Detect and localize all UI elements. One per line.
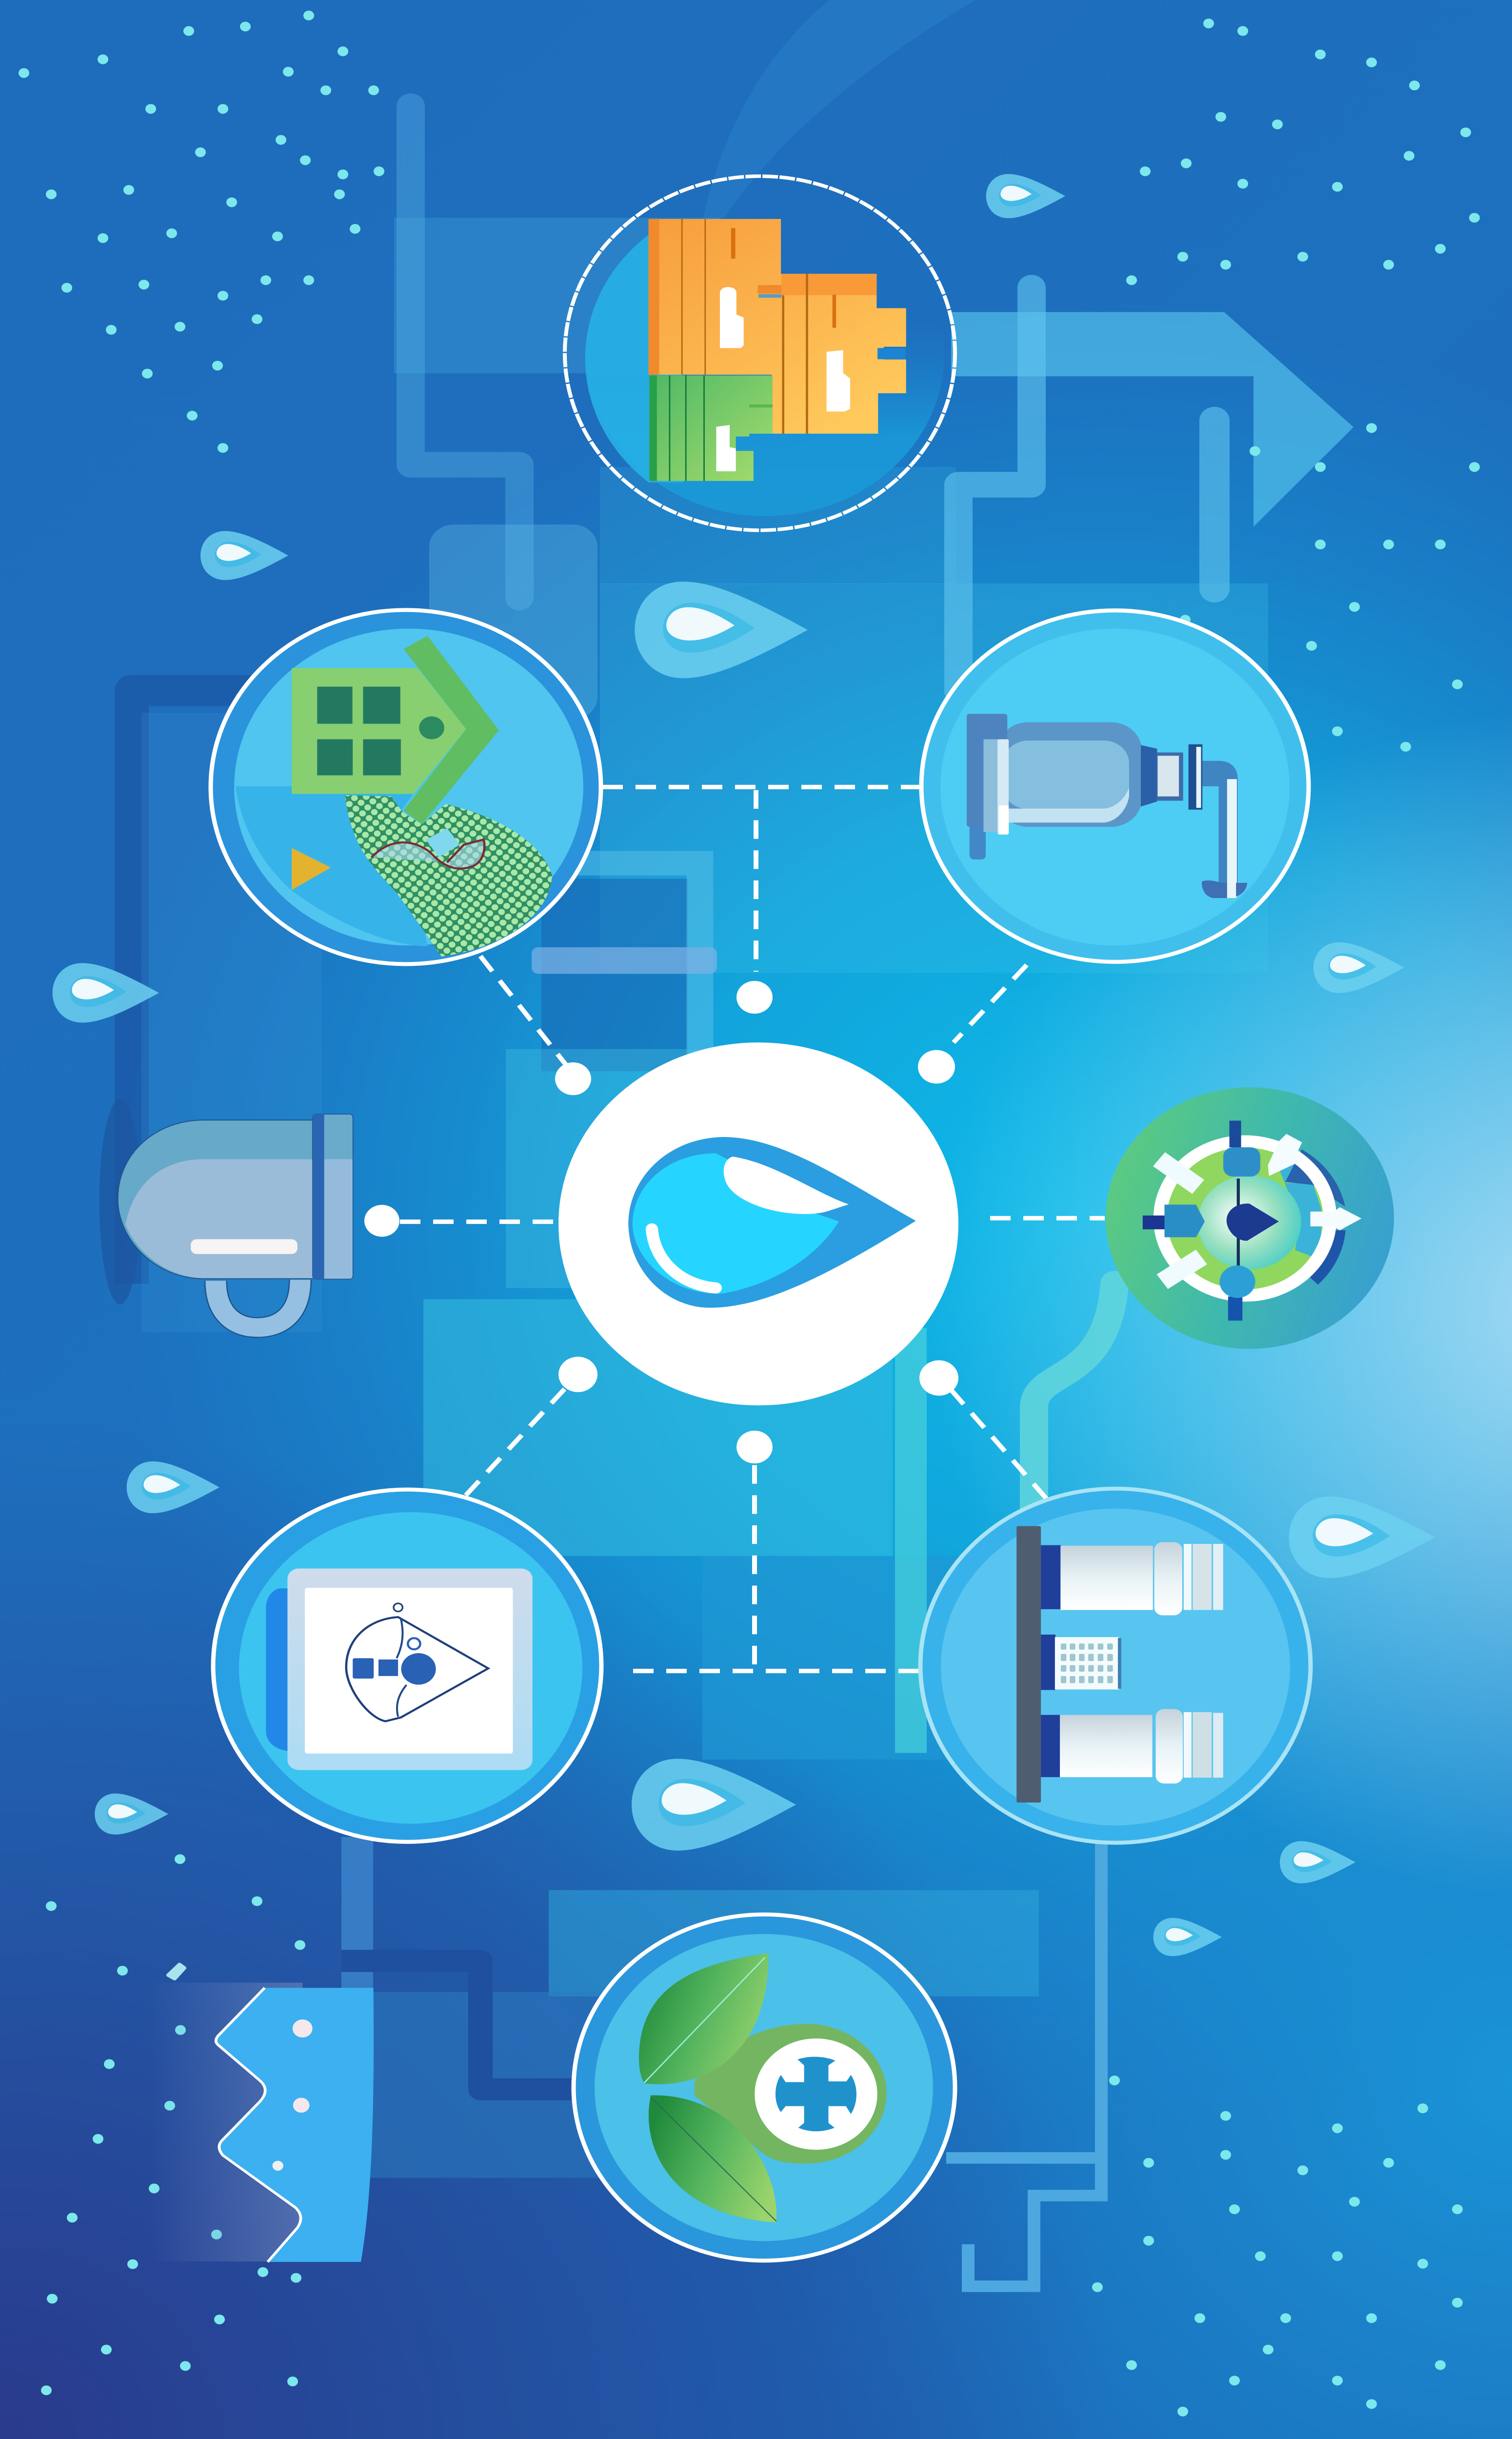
orange buildings [649, 219, 906, 434]
dashed connectors [400, 787, 1105, 1671]
icon: zigzag water edge [111, 1982, 374, 2262]
background pipes and panels [132, 106, 1353, 2286]
droplet large [635, 581, 808, 678]
icon: gear circle right [1106, 1087, 1394, 1349]
green building [649, 376, 773, 481]
upper cylinder [1041, 1542, 1223, 1615]
droplet [53, 963, 159, 1022]
dots: bottom left cluster [41, 1854, 305, 2395]
central droplet hub [558, 1042, 958, 1405]
panel: top circle, buildings [565, 176, 955, 530]
dots: top left cluster [19, 11, 384, 453]
droplet [95, 1794, 168, 1835]
lower cylinder [1041, 1709, 1223, 1783]
grid module [1041, 1635, 1121, 1690]
house [292, 668, 466, 794]
droplet large [1289, 1497, 1435, 1578]
droplet [1154, 1918, 1222, 1956]
droplet [1280, 1841, 1355, 1883]
droplet large [632, 1759, 796, 1851]
warning triangle [292, 848, 331, 890]
dots: top right cluster [1126, 19, 1480, 752]
icon: faucet mug left [99, 1099, 353, 1327]
panel: lower-left circle, tablet [213, 1490, 601, 1842]
panel: lower-right circle, filter units [920, 1489, 1311, 1843]
droplet [1313, 942, 1404, 993]
panel: left circle, house [211, 610, 601, 964]
droplet diagram [346, 1617, 488, 1721]
leaves [639, 1953, 769, 2084]
droplet [200, 531, 288, 580]
green badge [695, 2024, 887, 2164]
panel: bottom circle, leaves [574, 1915, 955, 2260]
droplet [986, 174, 1065, 218]
mesh patch [345, 795, 552, 957]
connector nodes [364, 981, 958, 1463]
panel: right circle, valve [921, 610, 1309, 962]
droplet [127, 1461, 219, 1513]
dots: bottom right cluster [1092, 2076, 1463, 2417]
